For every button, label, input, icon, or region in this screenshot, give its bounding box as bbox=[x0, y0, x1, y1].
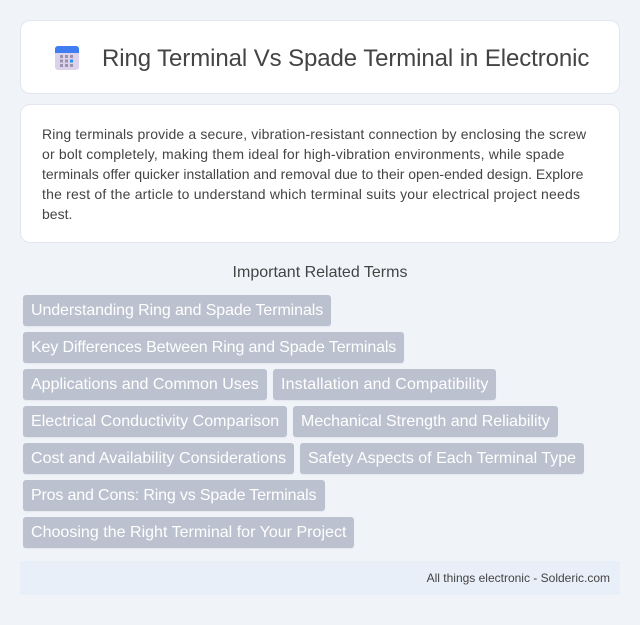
tag: Applications and Common Uses bbox=[31, 376, 259, 393]
intro card bbox=[20, 104, 620, 243]
tag: Installation and Compatibility bbox=[281, 376, 489, 393]
tag: Safety Aspects of Each Terminal Type bbox=[308, 450, 576, 467]
tag: Cost and Availability Considerations bbox=[31, 450, 286, 467]
tag bbox=[293, 406, 558, 437]
intro text bbox=[42, 126, 586, 222]
tag: Understanding Ring and Spade Terminals bbox=[31, 302, 323, 319]
icon: calendar bbox=[55, 46, 79, 70]
tag bbox=[273, 369, 496, 400]
tag: Mechanical Strength and Reliability bbox=[301, 413, 550, 430]
intro text: best. bbox=[42, 206, 72, 222]
title: Ring Terminal Vs Spade Terminal in Electronic bbox=[102, 45, 589, 72]
footer bar: All things electronic - Solderic.com bbox=[427, 571, 610, 585]
tag: Choosing the Right Terminal for Your Project bbox=[31, 524, 346, 541]
header card bbox=[20, 20, 620, 94]
tag bbox=[23, 295, 331, 326]
intro text: or bolt completely, making them ideal for high-vibration environments, while spade bbox=[42, 146, 565, 162]
footer bar bbox=[20, 561, 620, 595]
tag: Key Differences Between Ring and Spade Terminals bbox=[31, 339, 396, 356]
tag: Electrical Conductivity Comparison bbox=[31, 413, 279, 430]
tag bbox=[23, 517, 354, 548]
intro text: Ring terminals provide a secure, vibration-resistant connection by enclosing the screw bbox=[42, 126, 586, 142]
tag: Pros and Cons: Ring vs Spade Terminals bbox=[31, 487, 316, 504]
tag bbox=[23, 406, 287, 437]
heading: important related terms: Important Related Terms bbox=[233, 264, 407, 281]
tag bbox=[23, 369, 267, 400]
tag list bbox=[23, 295, 584, 549]
tag bbox=[23, 480, 325, 511]
tag bbox=[23, 443, 294, 474]
tag bbox=[300, 443, 584, 474]
tag bbox=[23, 332, 404, 363]
intro text: the rest of the article to understand which terminal suits your electrical project needs bbox=[42, 186, 580, 202]
intro text: terminals offer quicker installation and removal due to their open-ended design. Explore bbox=[42, 166, 583, 182]
